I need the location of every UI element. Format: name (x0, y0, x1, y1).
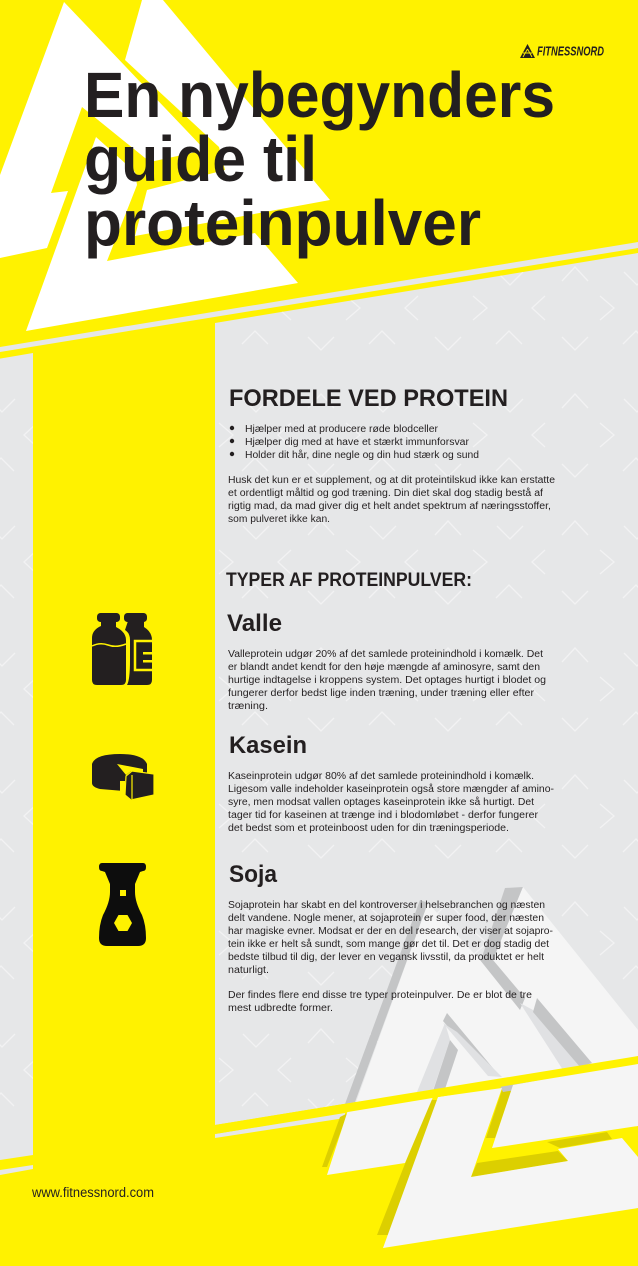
heading: typer af proteinpulver: TYPER AF PROTEINPULVER: (226, 570, 472, 591)
soja text: Sojaprotein har skabt en del kontroverser i helsebranchen og næsten (228, 900, 545, 911)
benefits list: Hjælper dig med at have et stærkt immunforsvar (245, 437, 470, 448)
kasein text: Ligesom valle indeholder kaseinprotein også store mængder af amino- (228, 783, 554, 795)
website url: www.fitnessnord.com (31, 1185, 154, 1200)
valle text (228, 649, 546, 712)
valle text: Valleprotein udgør 20% af det samlede proteinindhold i komælk. Det (228, 649, 543, 660)
icon: milk bottles (92, 613, 152, 685)
soja text: naturligt. (228, 965, 269, 976)
valle text: hurtige indtagelse i kroppens system. Det optages hurtigt i blodet og (228, 675, 546, 686)
soja text: tein ikke er helt så sundt, som mange gør det til. Det er dog stadig det (228, 938, 549, 950)
benefits paragraph: Husk det kun er et supplement, og at dit proteintilskud ikke kan erstatte (228, 475, 555, 486)
heading: fordele ved protein: FORDELE VED PROTEIN (229, 385, 508, 412)
top white triangle mark (0, 0, 330, 331)
valle text: fungerer derfor bedst lige inden træning, under træning eller efter (228, 688, 535, 699)
soja text (228, 900, 553, 976)
kasein text: tager tid for kaseinen at trænge ind i blodomløbet - derfor fungerer (228, 810, 539, 821)
benefits paragraph: som pulveret ikke kan. (228, 514, 330, 525)
soja text: har magiske evner. Modsat er der en del research, der viser at sojapro- (228, 926, 553, 937)
title: En nybegynders (84, 59, 555, 131)
kasein text (228, 771, 554, 834)
kasein text: det bedst som et proteinboost uden for din træningsperiode. (228, 823, 509, 834)
benefits list: Hjælper med at producere røde blodceller (245, 424, 439, 435)
panel: grey content background (0, 242, 638, 1175)
icon: cheese (92, 754, 154, 800)
closing text: Der findes flere end disse tre typer proteinpulver. De er blot de tre (228, 990, 532, 1001)
heading: soja: Soja (229, 861, 278, 888)
logo (520, 44, 604, 58)
valle text: træning. (228, 701, 268, 712)
title: guide til (84, 123, 317, 195)
kasein text: syre, men modsat vallen optages kaseinprotein ikke så hurtigt. Det (228, 796, 534, 808)
benefits paragraph: et ordentligt måltid og god træning. Din diet skal dog stadig bestå af (228, 487, 543, 499)
soja text: bedste tilbud til dig, der lever en vegansk livsstil, da produktet er helt (228, 952, 544, 963)
logo: FITNESSNORD (537, 44, 604, 58)
soja text: delt vandene. Nogle mener, at sojaprotein er super food, der næsten (228, 913, 544, 924)
title (84, 59, 555, 259)
valle text: er blandt andet kendt for den høje mængde af aminosyre, samt den (228, 662, 540, 673)
kasein text: Kaseinprotein udgør 80% af det samlede proteinindhold i komælk. (228, 771, 534, 782)
benefits list: Holder dit hår, dine negle og din hud stærk og sund (245, 449, 479, 461)
benefits paragraph: rigtig mad, da mad giver dig et helt andet spektrum af næringsstoffer, (228, 501, 551, 512)
closing text: mest udbredte former. (228, 1003, 333, 1014)
heading: kasein: Kasein (229, 732, 307, 759)
title: proteinpulver (84, 187, 481, 259)
icon: soy sauce bottle (99, 863, 146, 946)
benefits list (230, 424, 479, 461)
heading: valle: Valle (227, 610, 282, 637)
benefits paragraph (228, 475, 555, 525)
closing text (228, 990, 532, 1014)
bottom triangle mark (215, 887, 638, 1248)
